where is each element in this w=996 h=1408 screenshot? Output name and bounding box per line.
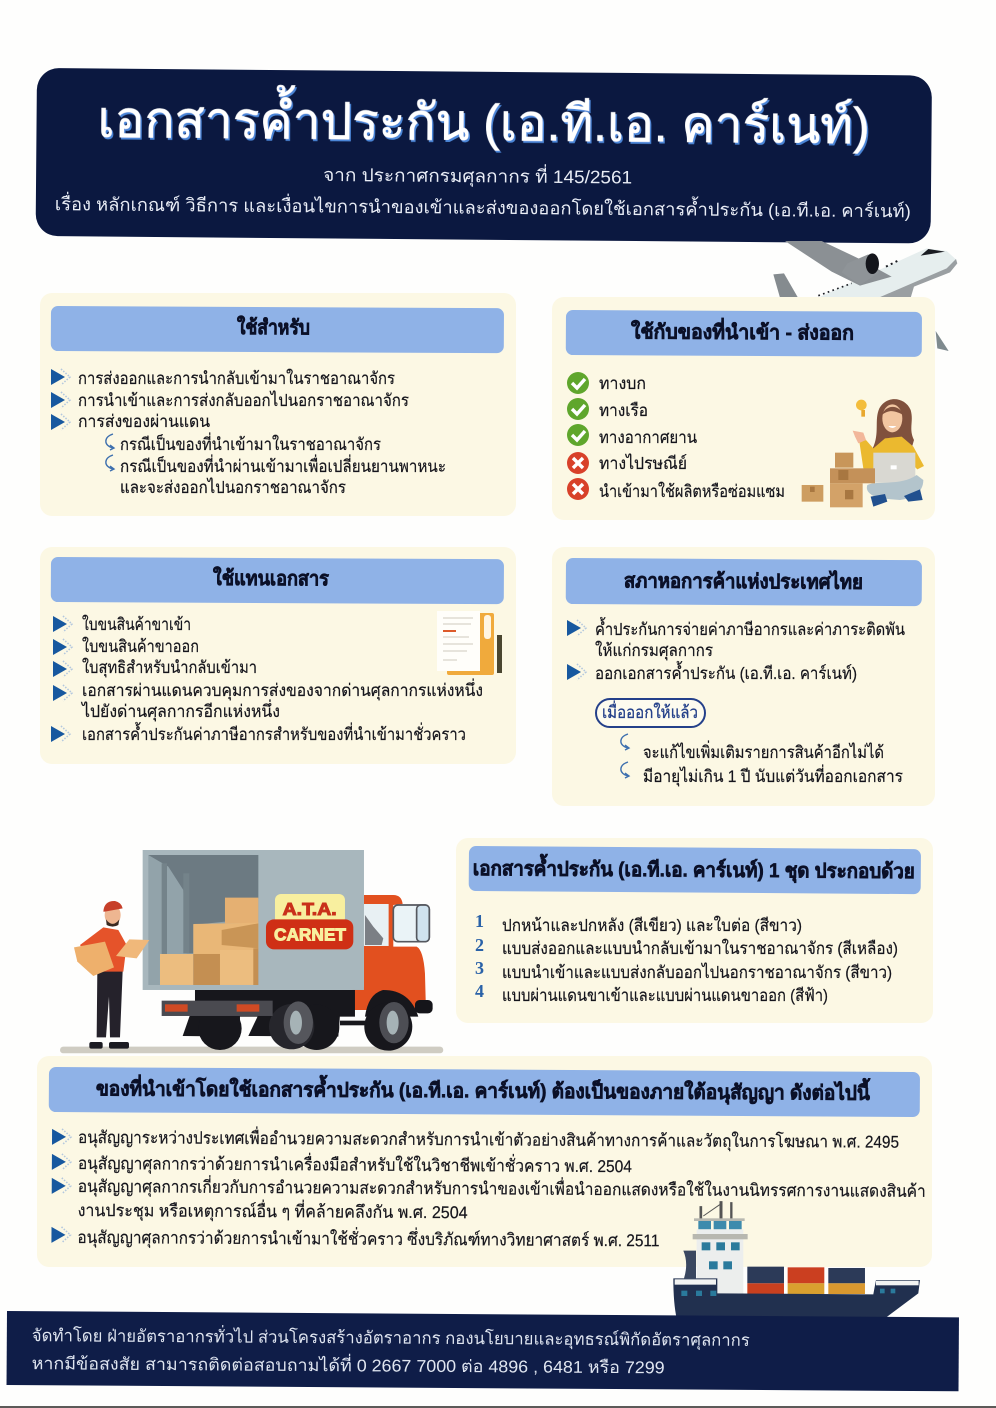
- callout: เมื่อออกให้แล้ว: เมื่อออกให้แล้ว: [602, 700, 698, 722]
- panel: อนุสัญญา: [37, 1056, 932, 1267]
- icon: airplane: [773, 241, 957, 351]
- bullet list: ให้แก่กรมศุลกากร: [595, 640, 713, 661]
- numbered list: ปกหน้าและปกหลัง (สีเขียว) และใบต่อ (สีขาว): [502, 915, 802, 935]
- heading: ของที่นำเข้าโดยใช้เอกสารค้ำประกัน: ของที่นำเข้าโดยใช้เอกสารค้ำประกัน (เอ.ที.เอ. คาร์เนท์) ต้องเป็นของภายใต้อนุสัญญา ดังต่อไปนี้: [96, 1073, 871, 1106]
- bullet list: กรณีเป็นของที่นำผ่านเข้ามาเพื่อเปลี่ยนยานพาหนะ: [120, 454, 446, 476]
- numbered list: 4: [475, 981, 484, 1001]
- heading: สภาหอการค้าแห่งประเทศไทย: สภาหอการค้าแห่งประเทศไทย: [624, 568, 863, 594]
- label: A.T.A. CARNET: [266, 894, 353, 949]
- callout: เมื่อออกให้แล้ว: [596, 699, 705, 727]
- notes list: จะแก้ไขเพิ่มเติมรายการสินค้าอีกไม่ได้: [643, 740, 884, 762]
- treaty list: อนุสัญญาศุลกากรว่าด้วยการนำเครื่องมือสำหรับใช้ในวิชาชีพเข้าชั่วคราว พ.ศ. 2504: [78, 1151, 632, 1177]
- bullet list: [51, 368, 446, 497]
- delivery man: [74, 901, 149, 1049]
- icon: woman with laptop and boxes: [802, 399, 924, 507]
- panel: ใช้สำหรับ: [40, 293, 516, 516]
- illustration: delivery man and truck: [60, 850, 443, 1053]
- footer band: [7, 1311, 959, 1391]
- heading: สภาหอการค้าแห่งประเทศไทย: [566, 558, 922, 606]
- panel: ชุดเอกสาร: [456, 838, 933, 1023]
- heading: ใช้แทนเอกสาร: [51, 557, 504, 604]
- title banner: [36, 68, 932, 243]
- bullet list: การส่งออกและการนำกลับเข้ามาในราชอาณาจักร: [78, 368, 395, 388]
- bullet list: กรณีเป็นของที่นำเข้ามาในราชอาณาจักร: [120, 432, 381, 454]
- bullet list: เอกสารผ่านแดนควบคุมการส่งของจากด่านศุลกากรแห่งหนึ่ง: [82, 678, 483, 701]
- bullet list: [567, 617, 905, 683]
- bullet list: ค้ำประกันการจ่ายค่าภาษีอากรและค่าภาระติดพัน: [595, 617, 905, 639]
- heading: ของที่นำเข้าโดยใช้เอกสารค้ำประกัน: [49, 1067, 920, 1117]
- numbered list: แบบนำเข้าและแบบส่งกลับออกไปนอกราชอาณาจักร (สีขาว): [502, 962, 892, 982]
- panel: ใช้กับของที่นำเข้า - ส่งออก: [552, 297, 935, 520]
- notes list: มีอายุไม่เกิน 1 ปี นับแต่วันที่ออกเอกสาร: [643, 764, 903, 787]
- treaty list: งานประชุม หรือเหตุการณ์อื่น ๆ ที่คล้ายคลึงกัน พ.ศ. 2504: [78, 1198, 468, 1223]
- illustration: cargo ship: [673, 1202, 920, 1318]
- heading: ใช้สำหรับ: ใช้สำหรับ: [237, 315, 310, 339]
- bullet list: ใบสุทธิสำหรับนำกลับเข้ามา: [82, 657, 257, 678]
- heading: ใช้สำหรับ: [51, 306, 504, 353]
- check list: ทางเรือ: [599, 401, 648, 420]
- treaty list: อนุสัญญาศุลกากรว่าด้วยการนำเข้ามาใช้ชั่วคราว ซึ่งบริภัณฑ์ทางวิทยาศาสตร์ พ.ศ. 2511: [77, 1225, 660, 1251]
- bullet list: ใบขนสินค้าขาเข้า: [82, 614, 191, 634]
- check list: ทางไปรษณีย์: [599, 453, 687, 473]
- check list: นำเข้ามาใช้ผลิตหรือซ่อมแซม: [599, 481, 785, 501]
- panel: ใช้แทนเอกสาร: [40, 547, 516, 764]
- heading: เอกสารค้ำประกัน 1 ชุด: [469, 846, 921, 894]
- numbered list: 2: [475, 935, 484, 955]
- bullet list: และจะส่งออกไปนอกราชอาณาจักร: [120, 477, 346, 497]
- icon: document and pen: [437, 611, 502, 675]
- treaty list: อนุสัญญาระหว่างประเทศเพื่ออำนวยความสะดวกสำหรับการนำเข้าตัวอย่างสินค้าทางการค้าและวัตถุในการโฆษณา พ.ศ. 2495: [78, 1125, 899, 1153]
- treaty list: [51, 1125, 926, 1253]
- bullet list: ออกเอกสารค้ำประกัน (เอ.ที.เอ. คาร์เนท์): [595, 661, 857, 683]
- heading: ใช้กับของที่นำเข้า - ส่งออก: [566, 310, 922, 357]
- bullet list: [51, 614, 483, 744]
- check list: ทางอากาศยาน: [599, 428, 697, 447]
- panel: สภาหอการค้าแห่งประเทศไทย: [552, 547, 935, 806]
- notes list: [621, 734, 903, 787]
- truck cab: [352, 895, 433, 1013]
- numbered list: [475, 911, 898, 1005]
- footer line 2: หากมีข้อสงสัย สามารถติดต่อสอบถามได้ที่ 0 2667 7000 ต่อ 4896 , 6481 หรือ 7299: [32, 1351, 665, 1377]
- bullet list: ใบขนสินค้าขาออก: [82, 636, 199, 656]
- subtitle line 2: เรื่อง หลักเกณฑ์ วิธีการ และเงื่อนไขการนำของเข้าและส่งของออกโดยใช้เอกสารค้ำประกัน (เอ.ที.เอ. คาร์เนท์): [55, 191, 911, 221]
- bullet list: การส่งของผ่านแดน: [78, 412, 210, 431]
- label: A.T.A. CARNET: CARNET: [274, 924, 346, 944]
- footer line 1: จัดทำโดย ฝ่ายอัตราอากรทั่วไป ส่วนโครงสร้างอัตราอากร กองนโยบายและอุทธรณ์พิกัดอัตราศุลกากร: [32, 1323, 750, 1351]
- check list: [567, 372, 785, 501]
- truck container with boxes: [143, 850, 364, 990]
- heading: ใช้แทนเอกสาร: ใช้แทนเอกสาร: [213, 566, 329, 590]
- bullet list: ไปยังด่านศุลกากรอีกแห่งหนึ่ง: [80, 699, 280, 722]
- title: เอกสารค้ำประกัน (เอ.ที.เอ. คาร์เนท์): [97, 84, 870, 154]
- truck chassis and wheels: [162, 990, 418, 1051]
- bullet list: การนำเข้าและการส่งกลับออกไปนอกราชอาณาจักร: [78, 390, 409, 410]
- heading: เอกสารค้ำประกัน 1 ชุด: เอกสารค้ำประกัน (เอ.ที.เอ. คาร์เนท์) 1 ชุด ประกอบด้วย: [473, 853, 915, 884]
- numbered list: แบบส่งออกและแบบนำกลับเข้ามาในราชอาณาจักร (สีเหลือง): [502, 938, 898, 958]
- numbered list: แบบผ่านแดนขาเข้าและแบบผ่านแดนขาออก (สีฟ้า): [502, 986, 828, 1005]
- numbered list: 3: [475, 958, 484, 978]
- label: A.T.A. CARNET: A.T.A.: [283, 899, 337, 919]
- treaty list: อนุสัญญาศุลกากรเกี่ยวกับการอำนวยความสะดวกสำหรับการนำของเข้าเพื่อนำออกแสดงหรือใช้ในงานนิทรรศการงานแสดงสินค้า: [78, 1174, 926, 1202]
- subtitle line 1: จาก ประกาศกรมศุลกากร ที่ 145/2561: [323, 162, 632, 188]
- bullet list: เอกสารค้ำประกันค่าภาษีอากรสำหรับของที่นำเข้ามาชั่วคราว: [82, 722, 466, 744]
- check list: ทางบก: [599, 374, 646, 393]
- heading: ใช้กับของที่นำเข้า - ส่งออก: ใช้กับของที่นำเข้า - ส่งออก: [631, 316, 854, 345]
- numbered list: 1: [475, 911, 484, 931]
